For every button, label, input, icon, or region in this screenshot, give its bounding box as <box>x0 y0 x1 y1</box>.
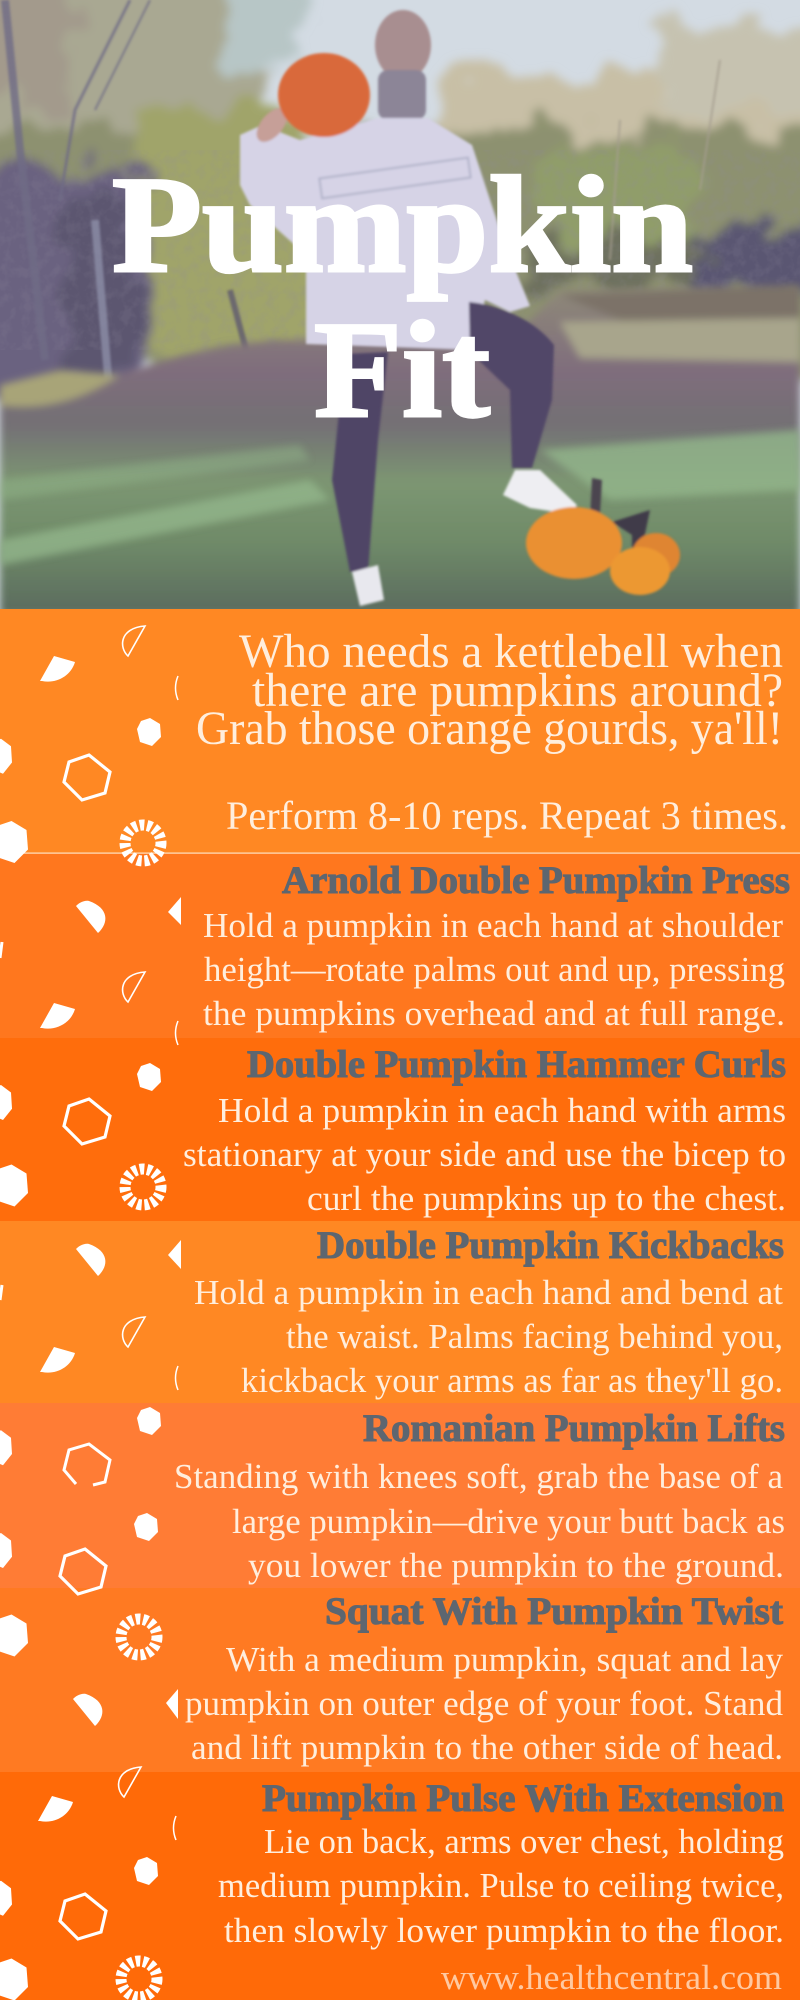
panel: kickbacks: the waist. Palms facing behind you, <box>286 1317 783 1356</box>
photo: woman holding a pumpkin in a park <box>0 0 800 615</box>
panel: squat twist: Squat With Pumpkin Twist <box>325 1590 783 1633</box>
small pumpkin <box>610 547 670 595</box>
panel: hammer curls: curl the pumpkins up to the chest. <box>307 1179 786 1218</box>
lawn <box>0 285 800 615</box>
white shoe on ground <box>352 565 384 606</box>
panel: hammer curls <box>0 1038 800 1221</box>
panel: hammer curls: Double Pumpkin Hammer Curls <box>247 1043 786 1086</box>
panel: pulse with extension: medium pumpkin. Pulse to ceiling twice, <box>218 1866 784 1905</box>
sweatshirt lettering <box>319 158 471 198</box>
pumpkin held on shoulder <box>278 53 370 137</box>
white shoe on pumpkin <box>503 470 577 514</box>
panel: squat twist: and lift pumpkin to the other side of head. <box>191 1728 783 1767</box>
website credit: www.healthcentral.com <box>441 1958 782 1997</box>
panel: kickbacks <box>0 1221 800 1403</box>
panel: arnold press <box>0 853 800 1038</box>
lawn light stripes <box>0 430 800 565</box>
panel: intro: there are pumpkins around? <box>252 664 783 717</box>
panel: romanian lifts: large pumpkin—drive your butt back as <box>232 1502 785 1541</box>
panel: pulse with extension: Lie on back, arms over chest, holding <box>264 1822 784 1861</box>
panel: intro <box>0 609 800 853</box>
panel: kickbacks: kickback your arms as far as they'll go. <box>241 1361 783 1400</box>
panel: romanian lifts: Romanian Pumpkin Lifts <box>363 1407 785 1450</box>
panel: romanian lifts: you lower the pumpkin to the ground. <box>248 1546 784 1585</box>
woman: raised leg <box>469 302 554 468</box>
foliage speckle <box>66 216 795 346</box>
panel: arnold press: height—rotate palms out and up, pressing <box>204 950 785 989</box>
panel: intro: Who needs a kettlebell when <box>239 625 783 678</box>
panel: squat twist <box>0 1588 800 1772</box>
background trees <box>0 0 800 400</box>
woman: sweatshirt <box>240 118 530 350</box>
panel: pulse with extension: then slowly lower pumpkin to the floor. <box>224 1911 784 1950</box>
panel: kickbacks: Hold a pumpkin in each hand and bend at <box>194 1273 783 1312</box>
panel: arnold press: Arnold Double Pumpkin Press <box>282 859 790 902</box>
woman: ponytail and hair <box>240 10 680 606</box>
panel: arnold press: the pumpkins overhead and at full range. <box>203 994 785 1033</box>
panel: hammer curls: stationary at your side and use the bicep to <box>183 1135 786 1174</box>
panel: kickbacks: Double Pumpkin Kickbacks <box>317 1224 784 1267</box>
stems <box>589 476 604 514</box>
panel: squat twist: With a medium pumpkin, squat and lay <box>226 1640 783 1679</box>
back pumpkin <box>632 533 680 577</box>
panel: squat twist: pumpkin on outer edge of your foot. Stand <box>185 1684 783 1723</box>
big pumpkin <box>526 507 622 579</box>
woman: standing leg <box>332 352 388 572</box>
panel: hammer curls: Hold a pumpkin in each hand with arms <box>218 1091 786 1130</box>
panel: pulse with extension: Pumpkin Pulse With Extension <box>262 1777 784 1820</box>
title <box>112 148 693 446</box>
tree trunks <box>5 0 720 410</box>
panel: intro: Perform 8-10 reps. Repeat 3 times. <box>226 793 788 838</box>
title: Pumpkin <box>112 148 693 301</box>
decorative geometric pattern <box>0 626 181 2000</box>
panel: intro: Grab those orange gourds, ya'll! <box>196 702 783 755</box>
panel: arnold press: Hold a pumpkin in each hand at shoulder <box>203 906 783 945</box>
title: Fit <box>314 293 490 446</box>
panel: romanian lifts <box>0 1403 800 1588</box>
panel: pulse with extension <box>0 1772 800 2000</box>
panel: romanian lifts: Standing with knees soft, grab the base of a <box>174 1457 783 1496</box>
woman: hand <box>256 108 288 143</box>
